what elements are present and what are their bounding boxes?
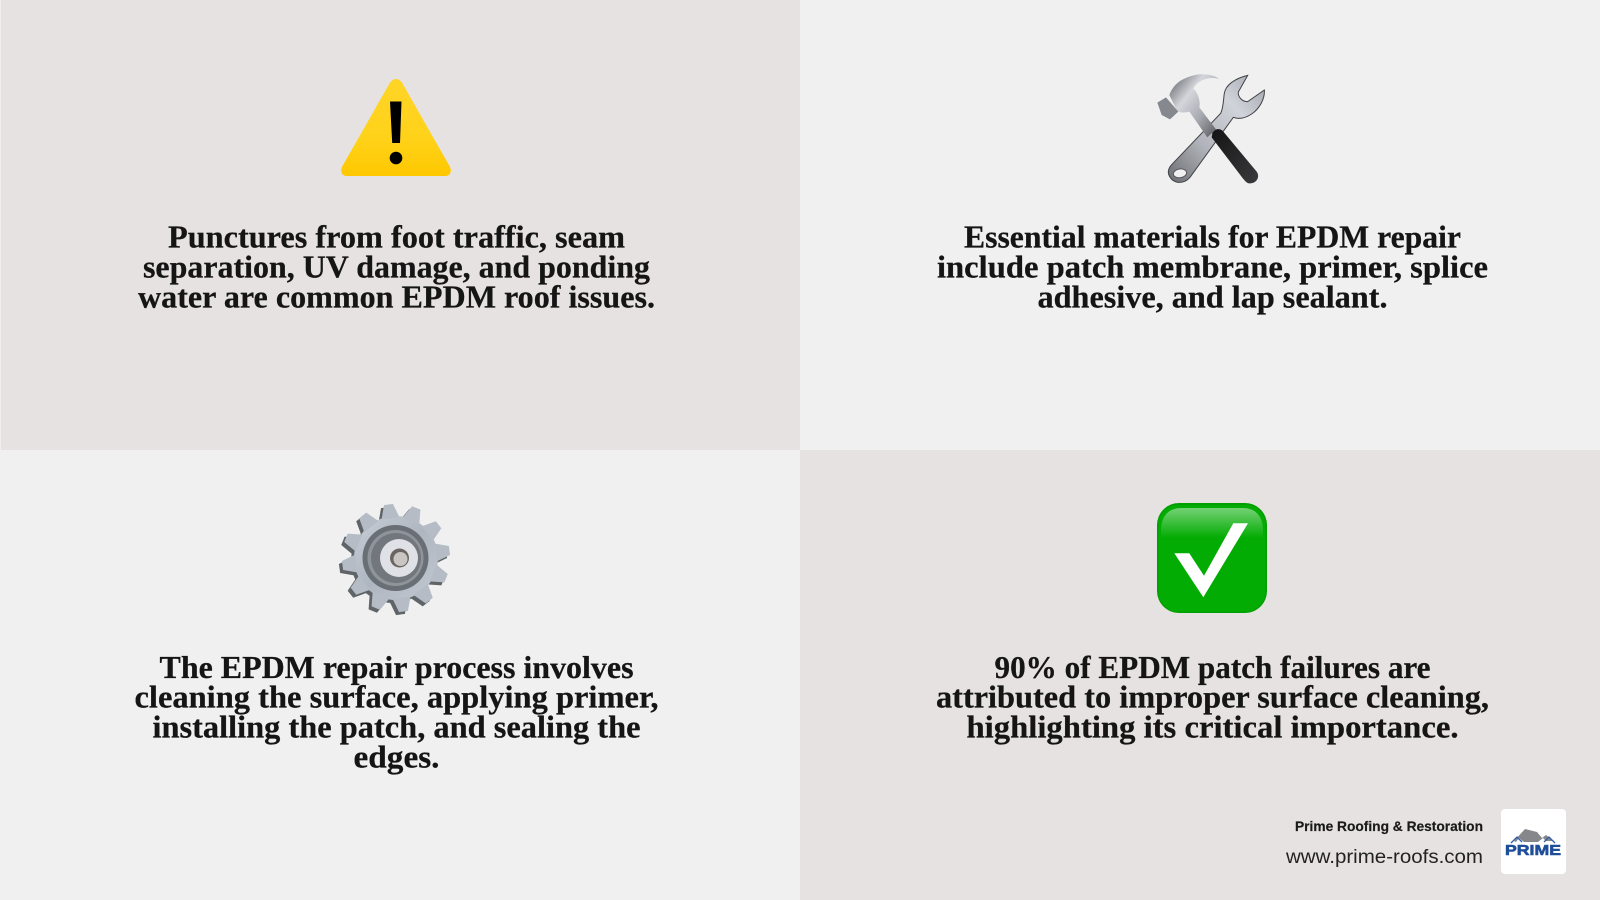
text: essential materials: include patch membrane, primer, splice [937, 248, 1488, 284]
panel: essential materials [800, 0, 1600, 450]
icon: green check mark [1157, 503, 1267, 613]
icon: gear [338, 503, 451, 616]
text: common issues: water are common EPDM roof issues. [138, 278, 655, 314]
panel: patch failures [800, 450, 1600, 900]
company name: Prime Roofing & Restoration [1295, 818, 1483, 834]
text: repair process: cleaning the surface, applying primer, [134, 678, 658, 714]
text: repair process: The EPDM repair process involves [160, 649, 634, 685]
text: repair process: edges. [354, 738, 440, 774]
panel: repair process [0, 450, 800, 900]
logo: Prime [1501, 809, 1566, 874]
text: patch failures: highlighting its critical importance. [966, 708, 1458, 744]
text: common issues: Punctures from foot traffic, seam [168, 218, 625, 254]
website url: www.prime-roofs.com [1285, 847, 1483, 868]
text: common issues: separation, UV damage, and ponding [143, 248, 650, 284]
text: common issues [138, 218, 655, 314]
panel: common issues [0, 0, 800, 450]
text: essential materials: Essential materials for EPDM repair [964, 218, 1461, 254]
text: repair process: installing the patch, and sealing the [152, 708, 640, 744]
text: patch failures [936, 649, 1489, 744]
text: essential materials [937, 218, 1488, 314]
icon: hammer and wrench [1157, 74, 1264, 183]
text: patch failures: attributed to improper surface cleaning, [936, 678, 1489, 714]
text: essential materials: adhesive, and lap sealant. [1038, 278, 1388, 314]
icon: warning triangle [341, 79, 451, 176]
text: repair process [134, 649, 658, 774]
hammer [1157, 74, 1258, 183]
wrench [1168, 75, 1264, 182]
logo: Prime: PRIME [1505, 842, 1561, 859]
text: patch failures: 90% of EPDM patch failures are [994, 649, 1430, 685]
